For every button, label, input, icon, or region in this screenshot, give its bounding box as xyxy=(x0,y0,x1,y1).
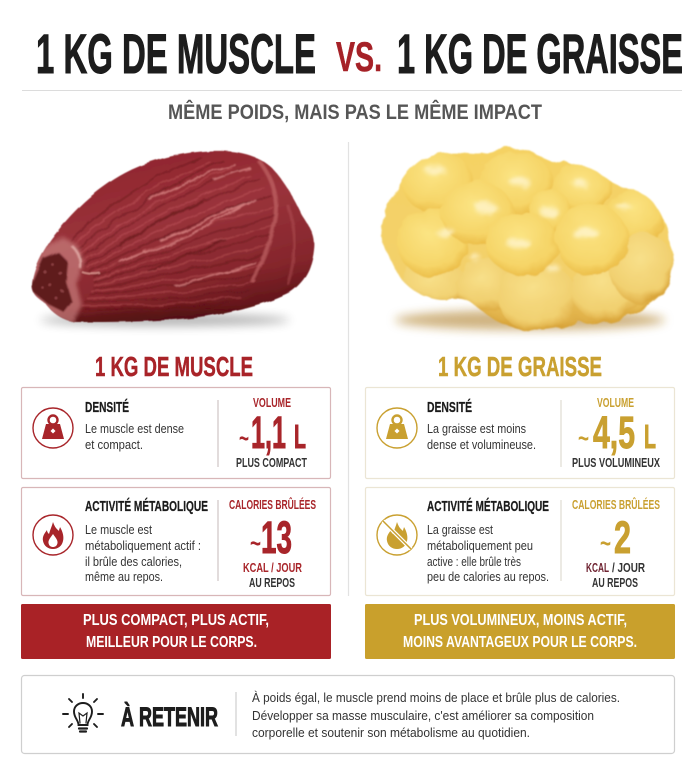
callout: muscle xyxy=(21,604,331,659)
callout: fat: MOINS AVANTAGEUX POUR LE CORPS. xyxy=(403,634,637,651)
panel: fat metabolism xyxy=(366,488,674,596)
callout: muscle: MEILLEUR POUR LE CORPS. xyxy=(86,634,257,651)
stat: calories 13: AU REPOS xyxy=(249,575,295,590)
stat: calories 2: AU REPOS xyxy=(592,575,638,590)
illustration: fat xyxy=(375,140,680,340)
stat: volume 4,5 L: L xyxy=(644,418,656,455)
panel: key takeaway xyxy=(22,676,674,754)
text: takeaway: Développer sa masse musculaire, c'est améliorer sa composition xyxy=(252,708,594,723)
stat: calories 2: ~ xyxy=(600,528,611,558)
stat: volume 4,5 L: 4,5 xyxy=(593,407,635,458)
stat: volume 1,1 L: PLUS COMPACT xyxy=(236,455,307,470)
title: 1 KG DE MUSCLE xyxy=(36,22,316,85)
text: takeaway: À poids égal, le muscle prend moins de place et brûle plus de calories. xyxy=(252,690,620,705)
icon: light bulb xyxy=(63,694,103,732)
stat: calories 2: / JOUR xyxy=(612,560,645,575)
text: takeaway xyxy=(252,690,620,740)
text: density: dense et volumineuse. xyxy=(427,437,536,452)
text: metabolism xyxy=(85,498,208,584)
text: metabolism: Le muscle est xyxy=(85,522,152,537)
text: takeaway: corporelle et soutenir son métabolisme au quotidien. xyxy=(252,725,530,740)
text: metabolism xyxy=(427,498,549,584)
text: metabolism: La graisse est xyxy=(427,522,493,537)
callout: fat: PLUS VOLUMINEUX, MOINS ACTIF, xyxy=(414,612,627,629)
stat: calories 13: KCAL / JOUR xyxy=(243,560,302,575)
stat: volume 1,1 L: 1,1 xyxy=(251,407,286,458)
stat: calories 13: 13 xyxy=(261,512,292,563)
stat: volume 4,5 L: ~ xyxy=(578,423,589,453)
illustration: muscle xyxy=(30,150,316,332)
text: density: DENSITÉ xyxy=(427,399,472,416)
heading: à retenir: À RETENIR xyxy=(121,701,218,732)
text: metabolism: même au repos. xyxy=(85,569,163,584)
text: metabolism: active : elle brûle très xyxy=(427,554,521,569)
fat seam xyxy=(252,160,276,282)
stat: calories 2: KCAL xyxy=(586,560,609,575)
stat: calories 2: 2 xyxy=(614,512,631,563)
text: metabolism: ACTIVITÉ MÉTABOLIQUE xyxy=(85,498,208,515)
text: density xyxy=(85,399,184,452)
stat: calories 2 xyxy=(572,497,660,590)
text: metabolism: métaboliquement peu xyxy=(427,538,533,553)
text: metabolism: il brûle des calories, xyxy=(85,554,182,569)
text: density: Le muscle est dense xyxy=(85,421,184,436)
stat: volume 1,1 L xyxy=(236,395,307,470)
callout: muscle: PLUS COMPACT, PLUS ACTIF, xyxy=(83,612,269,629)
heading: muscle: 1 KG DE MUSCLE xyxy=(95,351,253,382)
heading: graisse: 1 KG DE GRAISSE xyxy=(438,351,602,382)
stat: calories 13: ~ xyxy=(250,528,261,558)
stat: volume 4,5 L xyxy=(572,395,660,470)
stat: volume 1,1 L: L xyxy=(294,418,306,455)
icon: weight red xyxy=(33,408,73,448)
text: metabolism: métaboliquement actif : xyxy=(85,538,201,553)
icon: weight gold xyxy=(377,408,417,448)
icon: flame red xyxy=(33,515,73,555)
stat: calories 13 xyxy=(229,497,316,590)
stat: calories 13: CALORIES BRÛLÉES xyxy=(229,497,316,512)
panel: muscle metabolism xyxy=(22,488,330,596)
stat: volume 4,5 L: VOLUME xyxy=(597,395,634,410)
callout: fat xyxy=(365,604,675,659)
panel: muscle density xyxy=(22,388,330,478)
panel: fat density xyxy=(366,388,674,478)
text: density: La graisse est moins xyxy=(427,421,526,436)
stat: volume 4,5 L: PLUS VOLUMINEUX xyxy=(572,455,660,470)
stat: volume 1,1 L: VOLUME xyxy=(253,395,291,410)
text: density: et compact. xyxy=(85,437,143,452)
text: density xyxy=(427,399,536,452)
stat: volume 1,1 L: ~ xyxy=(239,423,249,453)
icon: crossed flame gold xyxy=(377,515,417,555)
subtitle: MÊME POIDS, MAIS PAS LE MÊME IMPACT xyxy=(168,100,542,124)
text: metabolism: ACTIVITÉ MÉTABOLIQUE xyxy=(427,498,549,515)
cut end xyxy=(28,236,84,325)
text: density: DENSITÉ xyxy=(85,399,129,416)
title: VS. xyxy=(336,33,382,80)
text: metabolism: peu de calories au repos. xyxy=(427,569,549,584)
